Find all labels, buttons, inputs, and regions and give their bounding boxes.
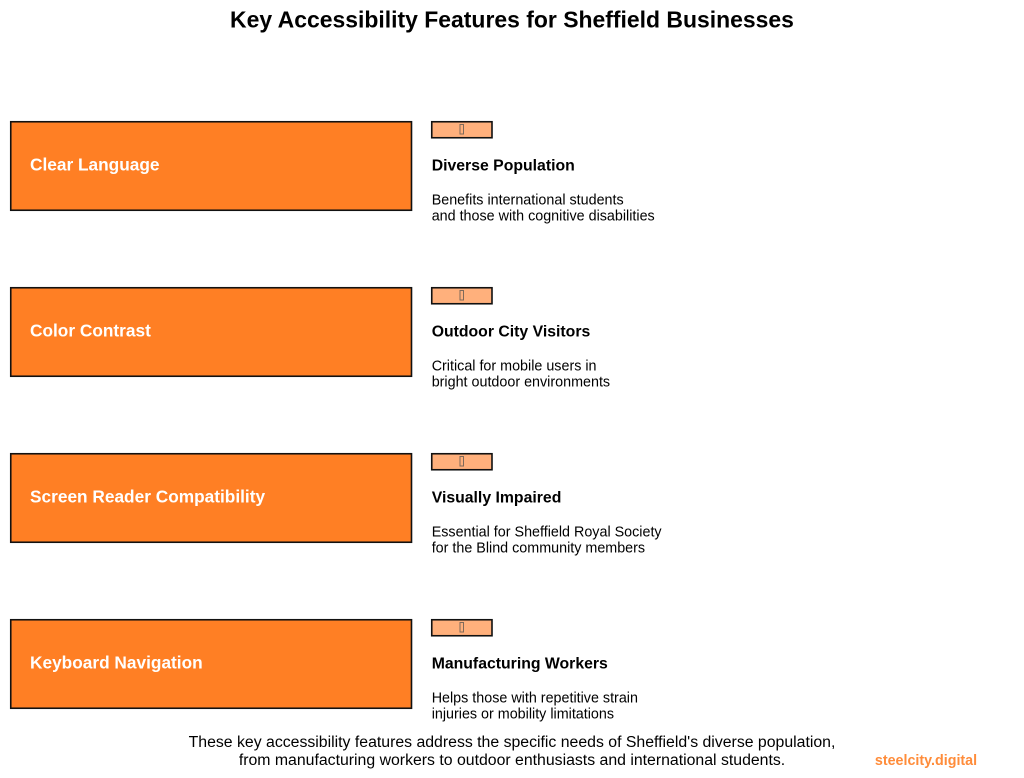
row: Clear Language bbox=[11, 122, 655, 224]
panel: Keyboard Navigation bbox=[11, 620, 412, 708]
text: Visually Impaired description: for the Blind community members bbox=[432, 540, 645, 556]
panel: Clear Language bbox=[11, 122, 412, 210]
row: Color Contrast bbox=[11, 288, 610, 390]
row: Keyboard Navigation bbox=[11, 620, 638, 722]
heading: Visually Impaired: Visually Impaired bbox=[432, 490, 561, 506]
icon: Visually Impaired bbox=[432, 454, 492, 470]
footer summary text: from manufacturing workers to outdoor enthusiasts and international students. bbox=[239, 752, 785, 769]
footer summary text: These key accessibility features address the specific needs of Sheffield's diverse population, bbox=[189, 734, 835, 751]
icon: Manufacturing Workers bbox=[432, 620, 492, 636]
text: Diverse Population description: and those with cognitive disabilities bbox=[432, 208, 655, 224]
text: Visually Impaired description: Essential for Sheffield Royal Society bbox=[432, 524, 662, 540]
text: Outdoor City Visitors description: bright outdoor environments bbox=[432, 374, 610, 390]
title: Key Accessibility Features for Sheffield Businesses bbox=[230, 6, 794, 32]
text: Diverse Population description: Benefits international students bbox=[432, 192, 624, 208]
text: Manufacturing Workers description: injuries or mobility limitations bbox=[432, 706, 614, 722]
panel: Clear Language: Clear Language bbox=[30, 154, 160, 174]
text: Outdoor City Visitors description: Critical for mobile users in bbox=[432, 358, 597, 374]
panel: Keyboard Navigation: Keyboard Navigation bbox=[30, 652, 203, 672]
panel: Screen Reader Compatibility: Screen Reader Compatibility bbox=[30, 486, 265, 506]
heading: Diverse Population: Diverse Population bbox=[432, 158, 575, 174]
panel: Color Contrast bbox=[11, 288, 412, 376]
heading: Manufacturing Workers: Manufacturing Workers bbox=[432, 656, 608, 672]
icon: Outdoor City Visitors bbox=[432, 288, 492, 304]
row: Screen Reader Compatibility bbox=[11, 454, 662, 556]
brand: steelcity.digital: steelcity.digital bbox=[875, 753, 977, 769]
panel: Color Contrast: Color Contrast bbox=[30, 320, 151, 340]
text: Manufacturing Workers description: Helps those with repetitive strain bbox=[432, 690, 638, 706]
heading: Outdoor City Visitors: Outdoor City Visitors bbox=[432, 324, 590, 340]
icon: Diverse Population bbox=[432, 122, 492, 138]
panel: Screen Reader Compatibility bbox=[11, 454, 412, 542]
